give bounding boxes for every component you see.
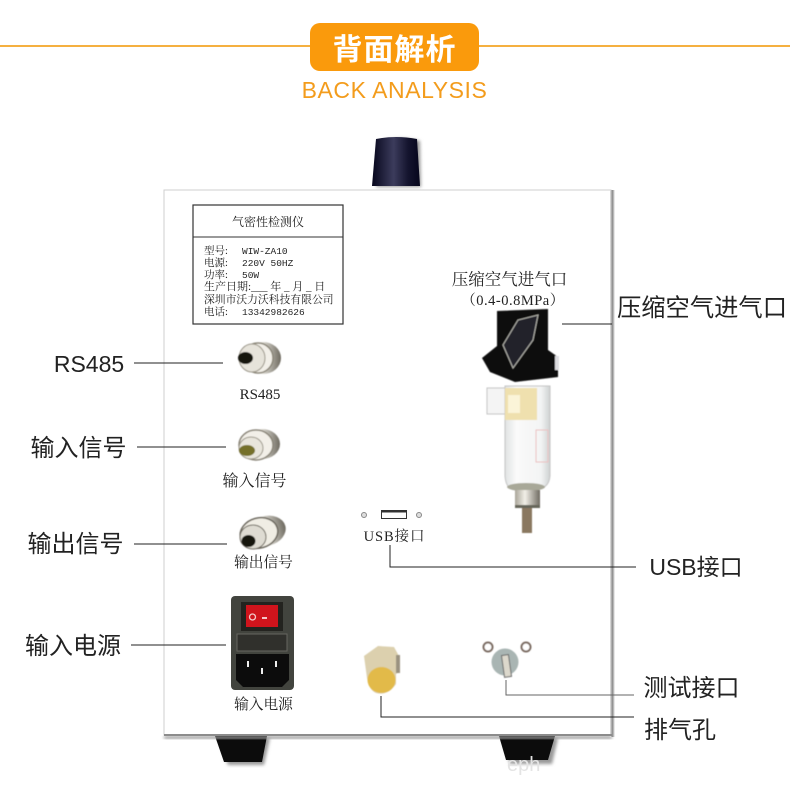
- icon: exhaust muffler: [364, 646, 400, 694]
- panel: nameplate: [193, 205, 343, 324]
- label: exhaust hole: 排气孔: [644, 717, 716, 744]
- panel: nameplate: 13342982626: [242, 307, 305, 318]
- watermark fragment: eph: [507, 754, 540, 776]
- panel: nameplate: 生产日期:___ 年 _ 月 _ 日: [204, 279, 325, 293]
- device body: [164, 190, 615, 739]
- icon: air filter: [482, 309, 559, 533]
- label: input signal: 输入信号: [30, 435, 126, 462]
- leader lines: [131, 324, 636, 717]
- caption: compressed air inlet: [452, 270, 567, 309]
- header rule left: [0, 45, 311, 47]
- title badge: 背面解析: [332, 34, 456, 67]
- label: test port: 测试接口: [644, 675, 740, 702]
- connector label: input signal: 输入信号: [222, 472, 287, 490]
- label: output signal: 输出信号: [28, 531, 124, 558]
- connector label: output signal: 输出信号: [234, 554, 293, 571]
- caption: compressed air inlet: 压缩空气进气口: [452, 270, 567, 289]
- panel: nameplate: 电源:: [204, 256, 228, 269]
- icon: top knob: [372, 137, 421, 187]
- panel: nameplate: 型号:: [204, 244, 228, 257]
- label: USB port: USB接口: [649, 554, 743, 580]
- icon: power socket with red switch: [231, 596, 294, 690]
- header rule right: [478, 45, 790, 47]
- device feet: [215, 736, 558, 765]
- connector label: RS485: RS485: [240, 387, 280, 403]
- panel: nameplate: 功率:: [204, 268, 228, 281]
- connector label: input power: 输入电源: [234, 695, 293, 713]
- panel: nameplate: 气密性检测仪: [232, 214, 304, 229]
- label: input power: 输入电源: [25, 633, 121, 660]
- title badge: [310, 23, 479, 71]
- connector: output signal: [237, 511, 289, 552]
- panel: nameplate: 220V 50HZ: [242, 258, 294, 269]
- caption: compressed air inlet: （0.4-0.8MPa）: [461, 292, 565, 309]
- connector: input signal: [239, 429, 280, 460]
- connector label: USB: USB接口: [364, 528, 425, 545]
- panel: nameplate: 50W: [242, 270, 259, 281]
- label: compressed air inlet: 压缩空气进气口: [617, 295, 787, 322]
- panel: nameplate: 深圳市沃力沃科技有限公司: [204, 292, 334, 306]
- panel: nameplate: WIW-ZA10: [242, 246, 288, 257]
- panel: nameplate: 电话:: [204, 305, 228, 318]
- icon: USB port: [362, 510, 422, 518]
- subtitle: BACK ANALYSIS: [302, 77, 487, 103]
- label: RS485: RS485: [54, 351, 124, 377]
- connector: RS485: [238, 342, 281, 374]
- icon: test port: [484, 642, 530, 677]
